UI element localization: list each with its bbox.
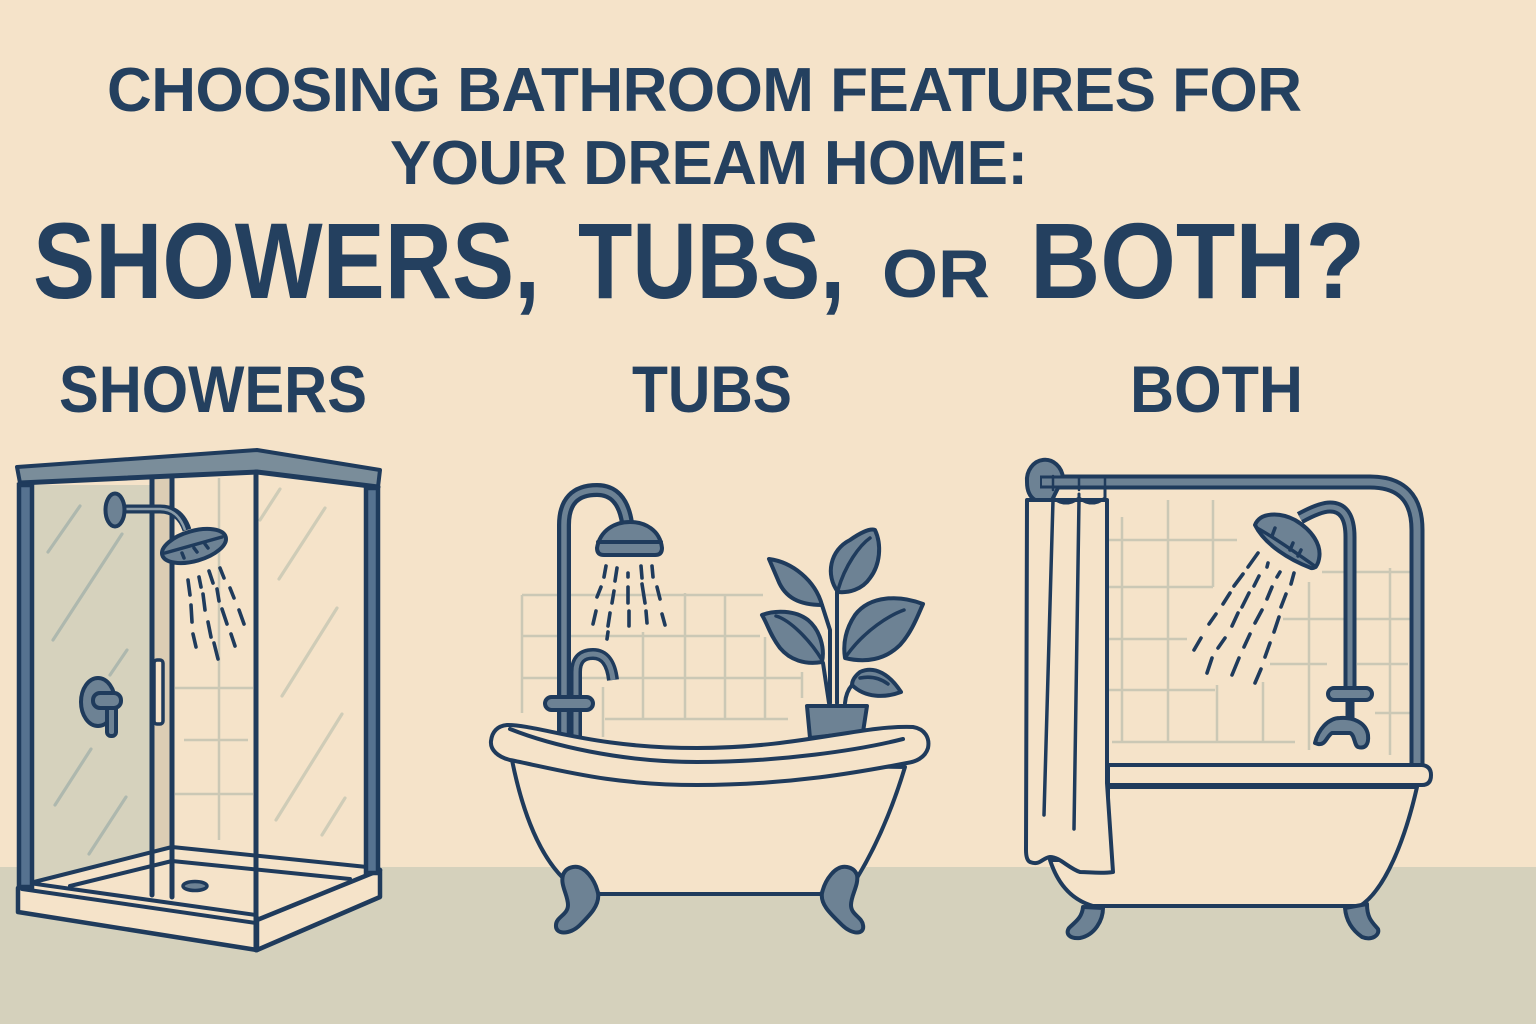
pot (807, 706, 867, 738)
rod wall mount (1027, 460, 1106, 500)
mixer valve (81, 678, 121, 736)
shower arm (106, 494, 187, 530)
door frame and corner (152, 472, 256, 950)
plant (762, 530, 923, 738)
title: TUBS, (578, 200, 845, 321)
curtain rings (1053, 490, 1105, 503)
illustration: clawfoot tub (491, 490, 928, 932)
title: OR (882, 236, 990, 312)
wall tile lines (522, 593, 802, 737)
wall tile lines (1108, 500, 1410, 755)
stems (822, 592, 852, 703)
illustration: tub with shower and curtain (1026, 460, 1431, 938)
curtain rod (1040, 482, 1417, 765)
shower head (1255, 515, 1320, 568)
shower head (597, 522, 662, 555)
tub rim (1108, 765, 1431, 785)
top frame (17, 450, 380, 487)
shower riser (1300, 507, 1350, 690)
tub feet (1068, 904, 1378, 938)
heading: tubs: TUBS (632, 352, 792, 426)
side posts (19, 485, 378, 887)
rim inner line (510, 729, 903, 762)
shower head (158, 522, 230, 570)
title (33, 56, 1365, 321)
wall tile lines (175, 478, 253, 840)
drain (183, 882, 207, 890)
curtain (1026, 490, 1113, 873)
leaves (831, 530, 879, 592)
heading: both: BOTH (1130, 352, 1303, 426)
water drops (593, 566, 665, 639)
title: BOTH? (1030, 200, 1365, 321)
heading: showers: SHOWERS (59, 352, 367, 426)
shower valve and spout (1315, 688, 1372, 748)
tub feet (556, 867, 863, 932)
illustration: glass shower enclosure (17, 450, 380, 950)
tub rim (491, 725, 928, 785)
tub body (512, 760, 905, 894)
tub body (1050, 787, 1417, 906)
water drops (1194, 553, 1294, 683)
faucet (545, 654, 613, 736)
shower tray (18, 846, 380, 950)
door handle (154, 660, 163, 724)
glass reflections (48, 489, 345, 854)
shower riser (564, 490, 627, 735)
water drops (188, 568, 244, 659)
floor (0, 867, 1536, 1024)
shower back panels (32, 485, 150, 880)
title: SHOWERS, (33, 200, 540, 321)
title: YOUR DREAM HOME: (390, 129, 1028, 198)
title: CHOOSING BATHROOM FEATURES FOR (107, 56, 1302, 125)
